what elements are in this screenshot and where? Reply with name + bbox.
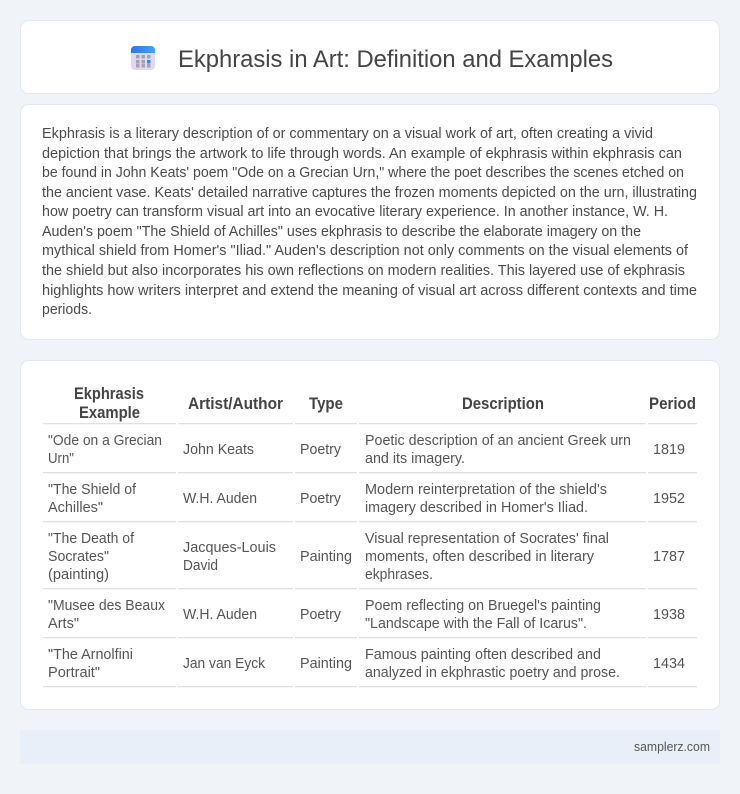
table row: The Shield of Achilles: Modern reinterpretation of the shield's [365, 482, 607, 498]
panel: intro paragraph: mythical shield from Homer's "Iliad." Auden's description not only comments on the visual elements of [42, 243, 689, 259]
footer: samplerz.com [634, 740, 710, 754]
table row: The Death of Socrates: David [183, 558, 218, 574]
table row: Ode on a Grecian Urn: 1819 [653, 442, 685, 458]
table row: Ode on a Grecian Urn: Poetry [300, 442, 342, 458]
table row: Musee des Beaux Arts: W.H. Auden [183, 607, 257, 623]
table row: The Shield of Achilles: W.H. Auden [183, 491, 257, 507]
table row: Ode on a Grecian Urn [48, 433, 685, 467]
table row: The Arnolfini Portrait [48, 647, 685, 681]
table row: Ode on a Grecian Urn: John Keats [183, 442, 254, 458]
table row: Musee des Beaux Arts: "Landscape with the Fall of Icarus". [365, 616, 587, 632]
footer [20, 730, 720, 764]
table row: The Shield of Achilles: imagery described in Homer's Iliad. [365, 500, 588, 516]
table row: The Death of Socrates: (painting) [48, 567, 109, 583]
panel: intro paragraph: highlights how writers interpret and extend the meaning of visual art across different contexts and time [42, 283, 697, 299]
table row: The Death of Socrates: Socrates" [48, 549, 109, 565]
table row: The Death of Socrates: 1787 [653, 549, 685, 565]
table row: Ode on a Grecian Urn: Urn" [48, 451, 74, 467]
table row: Ode on a Grecian Urn: and its imagery. [365, 451, 465, 467]
table row: The Arnolfini Portrait: Portrait" [48, 665, 100, 681]
panel: intro paragraph: periods. [42, 302, 92, 318]
table row: The Death of Socrates: Painting [300, 549, 352, 565]
table row: The Death of Socrates: Visual representation of Socrates' final [365, 531, 609, 547]
table row: The Shield of Achilles: Achilles" [48, 500, 103, 516]
panel: examples table [20, 360, 720, 710]
table row: The Death of Socrates: ekphrases. [365, 567, 433, 583]
table row: Musee des Beaux Arts: Poem reflecting on Bruegel's painting [365, 598, 601, 614]
icon: calendar [131, 46, 155, 70]
panel: intro paragraph: Ekphrasis is a literary description of or commentary on a visual work of art, often creating a vivid [42, 126, 653, 142]
table row: The Death of Socrates: Jacques-Louis [183, 540, 276, 556]
table header row: Example [79, 404, 140, 422]
table row: The Arnolfini Portrait: Jan van Eyck [183, 656, 266, 672]
table row: The Death of Socrates: "The Death of [48, 531, 135, 547]
title: Ekphrasis in Art: Definition and Examples [178, 46, 613, 73]
table row: The Shield of Achilles: 1952 [653, 491, 685, 507]
table row: Ode on a Grecian Urn: "Ode on a Grecian [48, 433, 162, 449]
panel: intro paragraph: the shield but also incorporates his own reflections on modern realities. This layered use of ekphrasis [42, 263, 685, 279]
table row: The Shield of Achilles: Poetry [300, 491, 342, 507]
table header row [74, 385, 696, 422]
table header row: Type [309, 395, 343, 413]
table row: The Shield of Achilles [48, 482, 685, 516]
table row: Musee des Beaux Arts: Arts" [48, 616, 79, 632]
table row: Musee des Beaux Arts: Poetry [300, 607, 342, 623]
table row: The Death of Socrates: moments, often described in literary [365, 549, 595, 565]
table header row: Period [649, 395, 696, 413]
table row: The Death of Socrates [48, 531, 685, 583]
table row: Musee des Beaux Arts: "Musee des Beaux [48, 598, 166, 614]
panel: intro paragraph: depiction that brings the artwork to life through words. An example of ekphrasis within ekphrasis can [42, 146, 682, 162]
panel: intro paragraph: how poetry can transform visual art into an evocative literary experience. In another instance, W. H. [42, 204, 668, 220]
panel: header [20, 20, 720, 94]
panel: intro paragraph [20, 104, 720, 340]
table row: The Arnolfini Portrait: Painting [300, 656, 352, 672]
table row: Ode on a Grecian Urn: Poetic description of an ancient Greek urn [365, 433, 631, 449]
table row: The Arnolfini Portrait: 1434 [653, 656, 685, 672]
panel: intro paragraph: the ancient vase. Keats' detailed narrative captures the frozen moments depicted on the urn, illustrating [42, 185, 697, 201]
table row: The Arnolfini Portrait: analyzed in ekphrastic poetry and prose. [365, 665, 620, 681]
panel: intro paragraph: be found in John Keats' poem "Ode on a Grecian Urn," where the poet describes the scenes etched on [42, 165, 684, 181]
table row: The Shield of Achilles: "The Shield of [48, 482, 137, 498]
table row: Musee des Beaux Arts: 1938 [653, 607, 685, 623]
table row: The Arnolfini Portrait: Famous painting often described and [365, 647, 601, 663]
table row: Musee des Beaux Arts [48, 598, 685, 632]
table row: The Arnolfini Portrait: "The Arnolfini [48, 647, 133, 663]
table header row: Artist/Author [188, 395, 284, 413]
table header row: Ekphrasis [74, 385, 144, 403]
table header row: Description [462, 395, 544, 413]
panel: intro paragraph: Auden's poem "The Shield of Achilles" uses ekphrasis to describe the elaborate imagery on the [42, 224, 641, 240]
